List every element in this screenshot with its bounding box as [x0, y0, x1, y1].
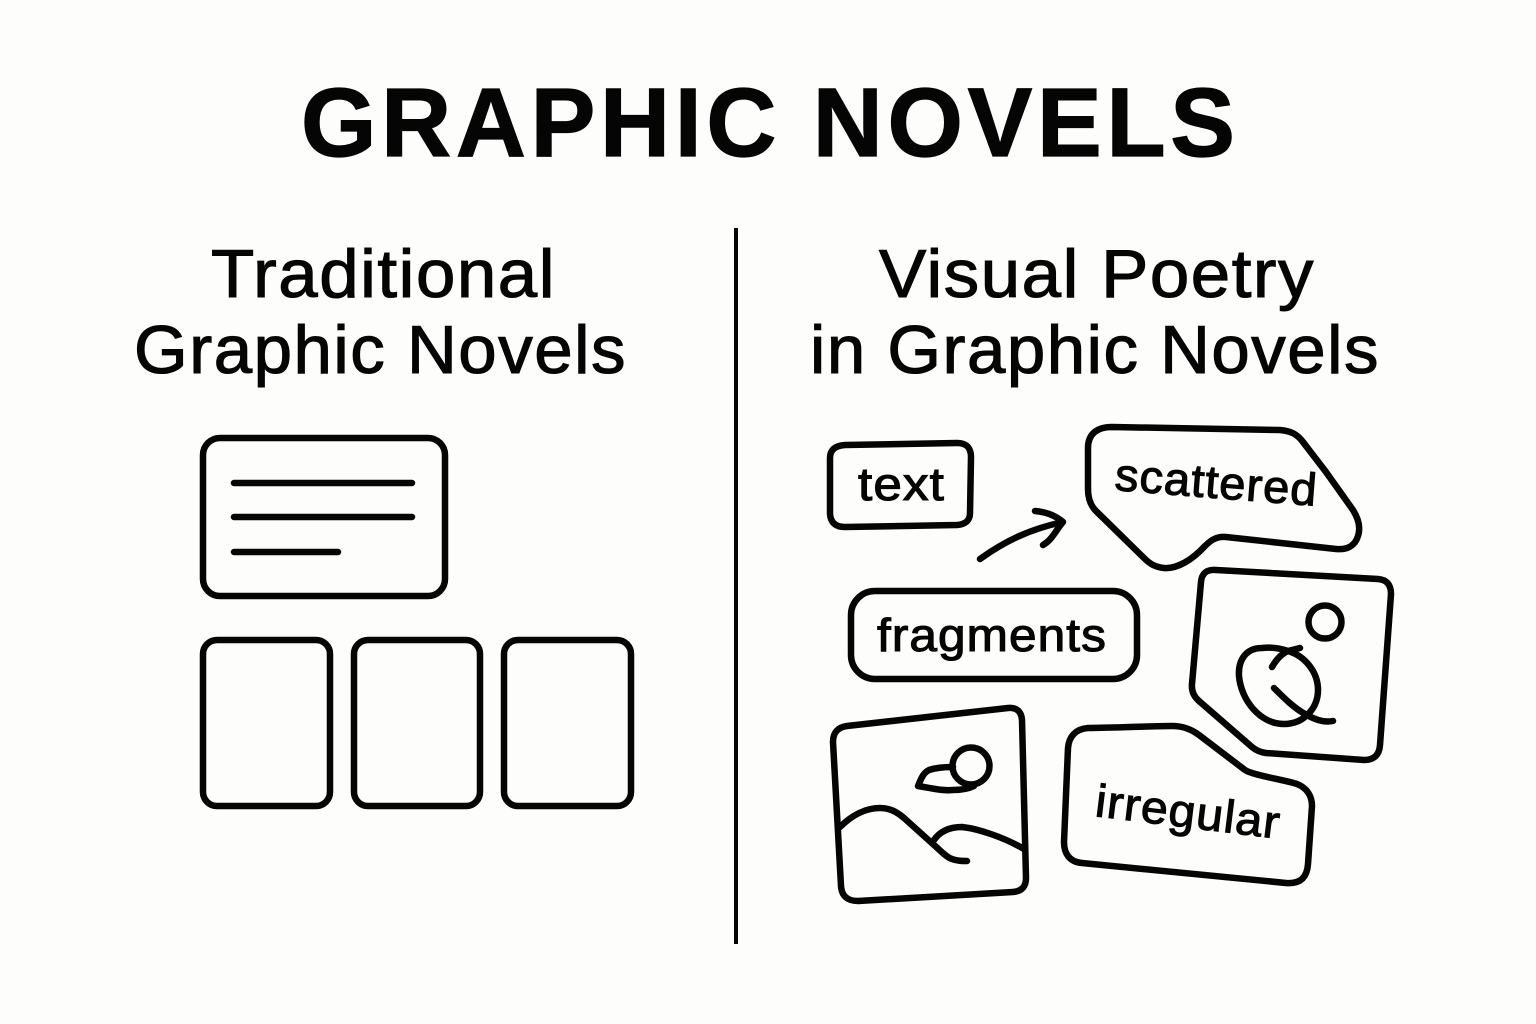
heading: visual poetry in graphic novels: in Graphic Novels [810, 312, 1380, 388]
row of three comic panels [203, 640, 631, 806]
heading: visual poetry in graphic novels [810, 236, 1380, 388]
title: GRAPHIC NOVELS [301, 68, 1235, 177]
panel: traditional graphic novels [134, 236, 631, 806]
shape: irregular: irregular [1093, 774, 1284, 849]
speech shape: scattered: scattered [1113, 448, 1320, 516]
shape: irregular [1064, 726, 1312, 883]
heading: traditional graphic novels: Traditional [211, 236, 556, 312]
panel: visual poetry in graphic novels [810, 236, 1391, 901]
image panel: apple and circle [1192, 570, 1391, 760]
text box: fragments [851, 591, 1137, 679]
speech shape: scattered [1088, 427, 1359, 568]
text box: text [830, 443, 971, 527]
image panel: landscape with sun and cloud [833, 708, 1026, 901]
heading: traditional graphic novels: Graphic Novels [134, 312, 627, 388]
text box: text: text [858, 458, 945, 510]
heading: visual poetry in graphic novels: Visual Poetry [879, 236, 1315, 312]
text box: fragments: fragments [877, 609, 1107, 661]
arrow [980, 511, 1063, 559]
heading: traditional graphic novels [134, 236, 627, 388]
divider between columns [734, 228, 738, 944]
text panel with lines [203, 438, 445, 596]
